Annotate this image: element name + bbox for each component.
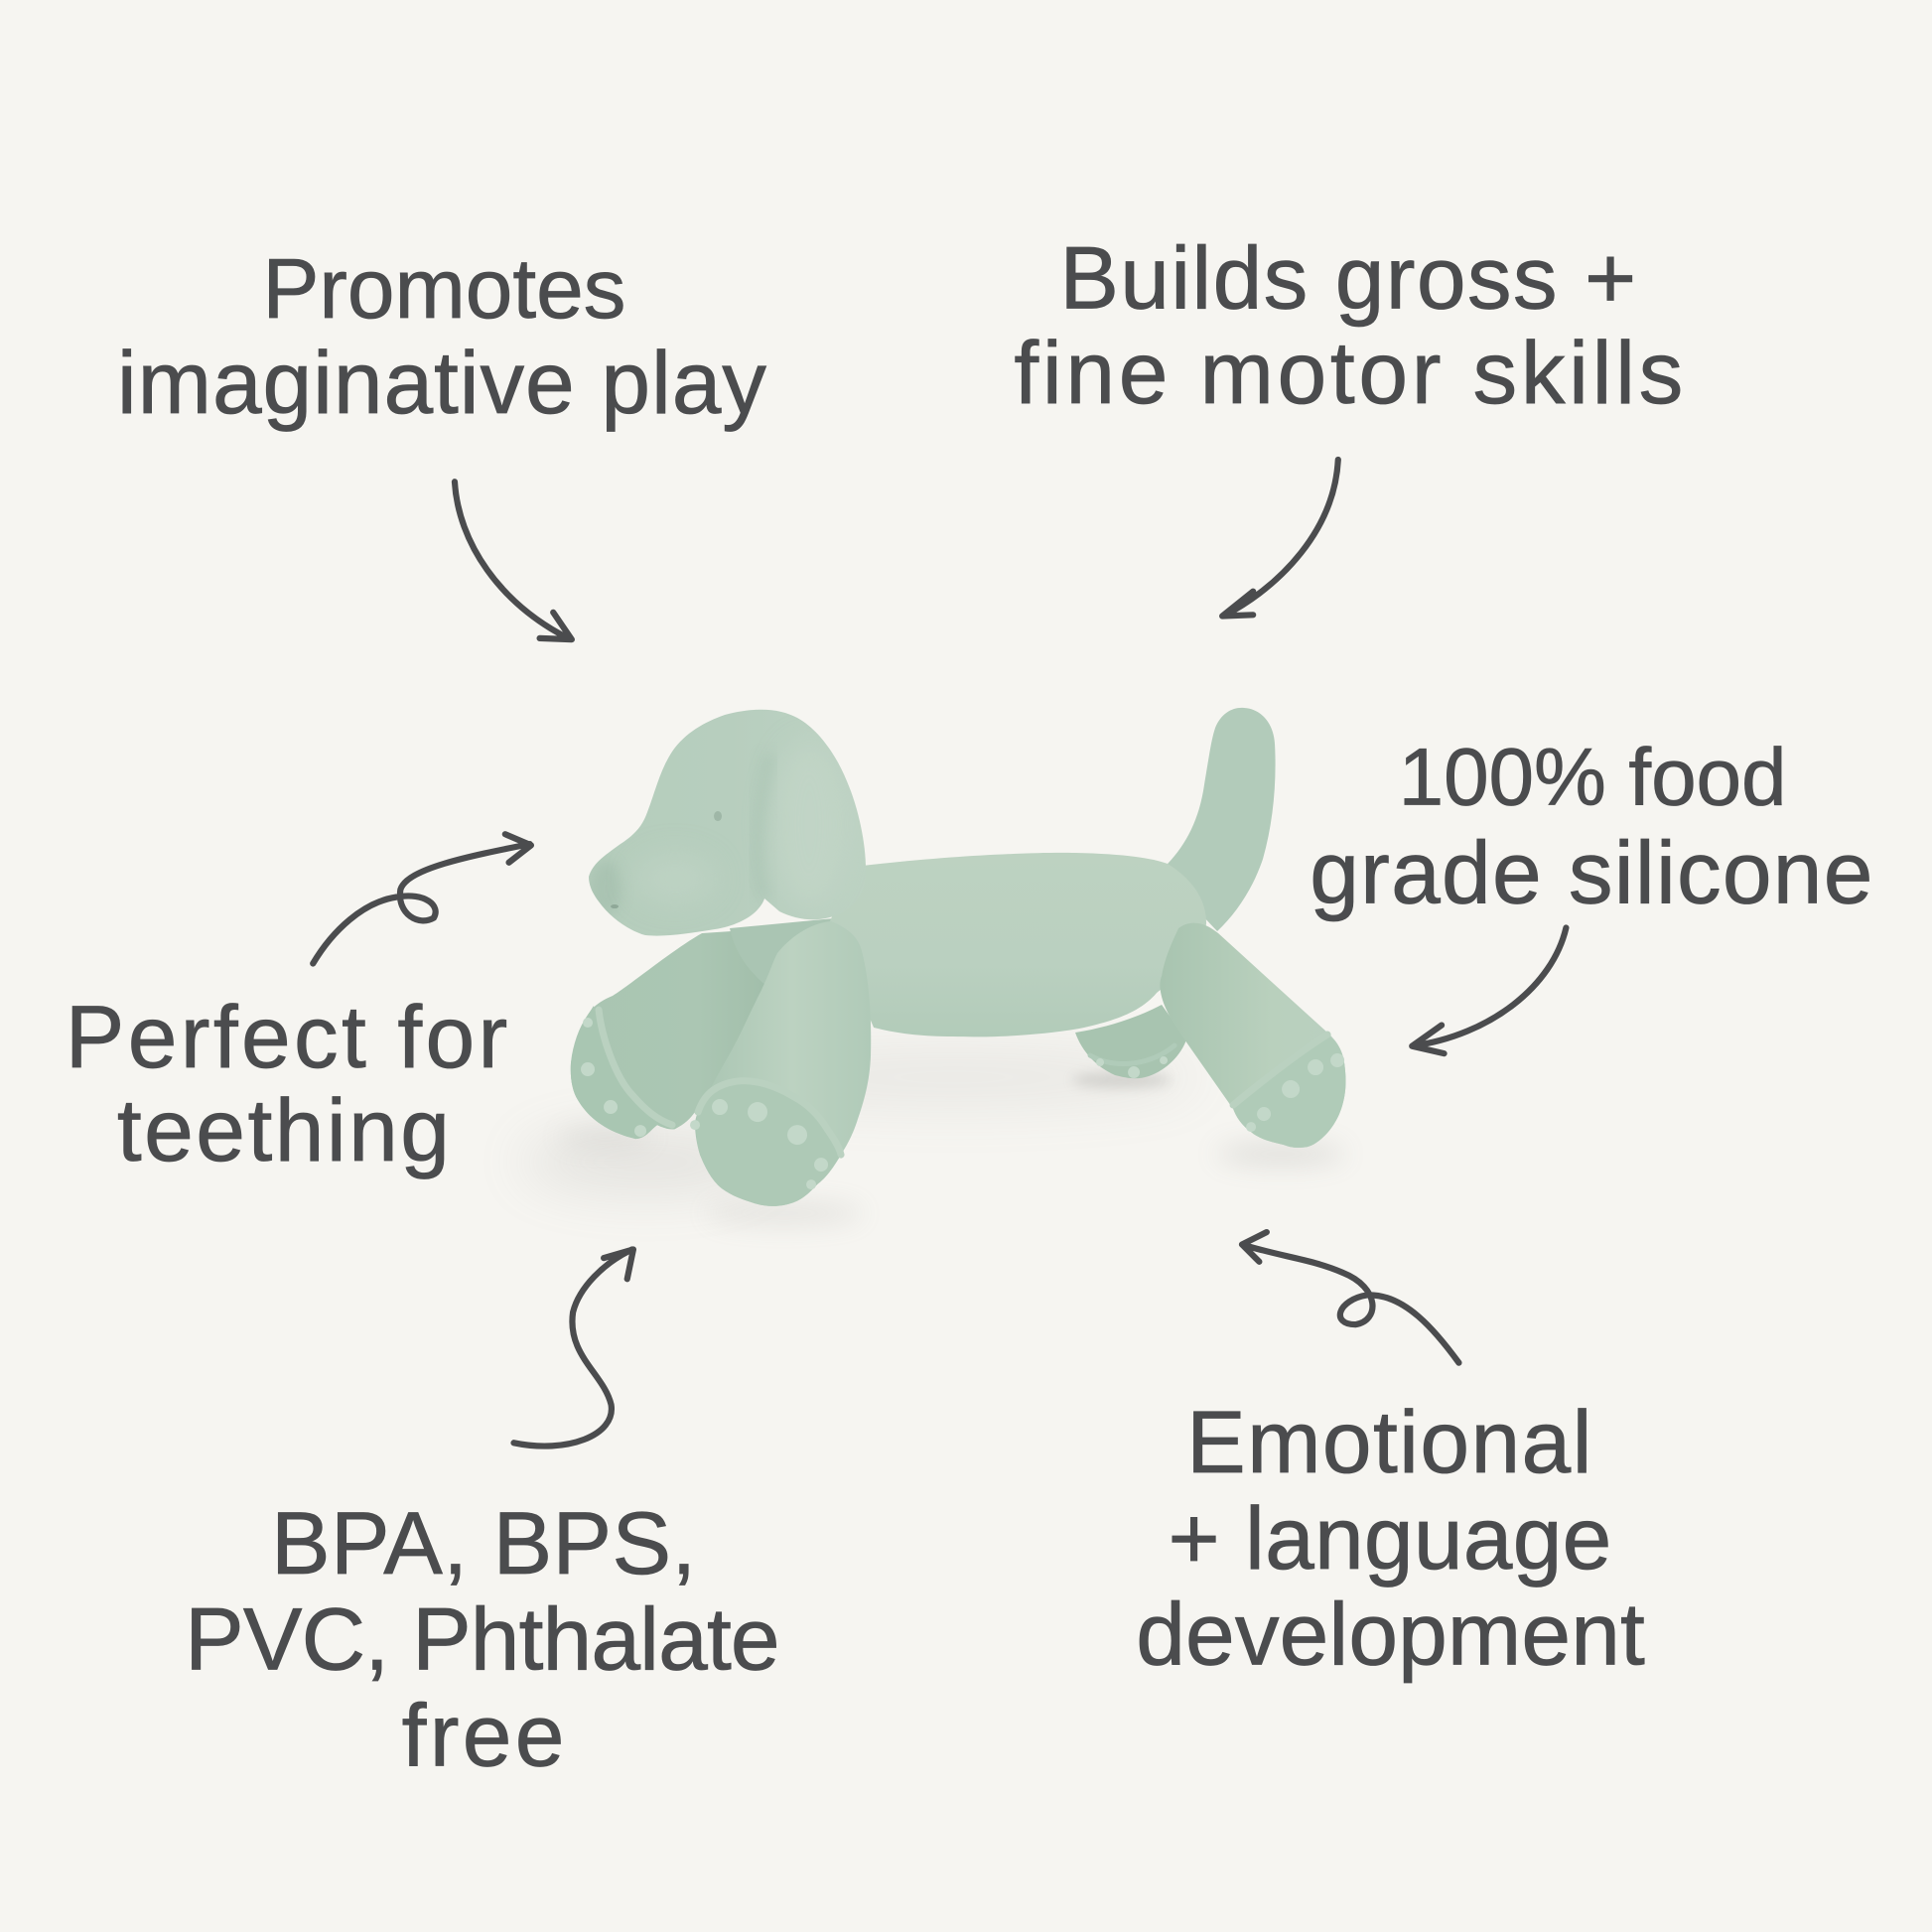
- hind foot tint: [1233, 1035, 1346, 1148]
- heading: Builds gross + fine motor skills: fine motor skills: [1014, 323, 1683, 422]
- body: [829, 853, 1206, 1036]
- heading: BPA, BPS, PVC, Phthalate free: BPA, BPS,: [271, 1493, 696, 1592]
- far front foot tint: [571, 1006, 675, 1139]
- heading: BPA, BPS, PVC, Phthalate free: free: [402, 1685, 564, 1784]
- arrow: emotional looped arrow: [1242, 1232, 1458, 1363]
- arrow: imaginative play to dog: [455, 482, 572, 639]
- heading: Emotional + language development: [1136, 1392, 1645, 1684]
- heading: Promotes imaginative play: imaginative play: [117, 333, 766, 432]
- far front leg: [571, 931, 784, 1139]
- heading: Perfect for teething: teething: [117, 1080, 450, 1179]
- near front leg: [695, 921, 871, 1206]
- heading: 100% food grade silicone: grade silicone: [1310, 823, 1872, 922]
- nose: [611, 904, 619, 908]
- heading: Perfect for teething: [66, 987, 507, 1179]
- near front foot tint: [696, 1082, 841, 1206]
- head and ear: [589, 710, 866, 936]
- heading: Emotional + language development: development: [1136, 1585, 1645, 1684]
- tail: [1168, 708, 1276, 931]
- heading: Emotional + language development: + language: [1169, 1488, 1611, 1587]
- teething bands: [599, 1010, 1327, 1155]
- infographic canvas: [71, 244, 1869, 1767]
- heading: Promotes imaginative play: Promotes: [262, 241, 625, 337]
- heading: 100% food grade silicone: [1310, 732, 1872, 922]
- ground shadow: [521, 1047, 1345, 1225]
- heading: Builds gross + fine motor skills: [1014, 227, 1683, 422]
- near hind leg: [1160, 923, 1346, 1148]
- heading: BPA, BPS, PVC, Phthalate free: PVC, Phthalate: [185, 1589, 780, 1689]
- arrow: motor skills to dog: [1222, 460, 1338, 617]
- far hind leg: [1075, 1005, 1186, 1078]
- heading: Promotes imaginative play: [117, 241, 766, 432]
- arrow: teething looped arrow: [313, 834, 531, 964]
- heading: Perfect for teething: Perfect for: [66, 987, 507, 1086]
- heading: Builds gross + fine motor skills: Builds gross +: [1059, 227, 1636, 327]
- neck: [730, 918, 834, 988]
- heading: Emotional + language development: Emotional: [1186, 1392, 1591, 1491]
- balloon dog teether: [521, 708, 1346, 1225]
- eye: [714, 811, 722, 821]
- arrow: silicone to dog: [1412, 928, 1566, 1053]
- heading: 100% food grade silicone: 100% food: [1399, 732, 1787, 822]
- teething bumps: [581, 1018, 1344, 1189]
- arrow: BPA free squiggle: [514, 1249, 633, 1447]
- heading: BPA, BPS, PVC, Phthalate free: [185, 1493, 780, 1784]
- head shading: [591, 857, 760, 914]
